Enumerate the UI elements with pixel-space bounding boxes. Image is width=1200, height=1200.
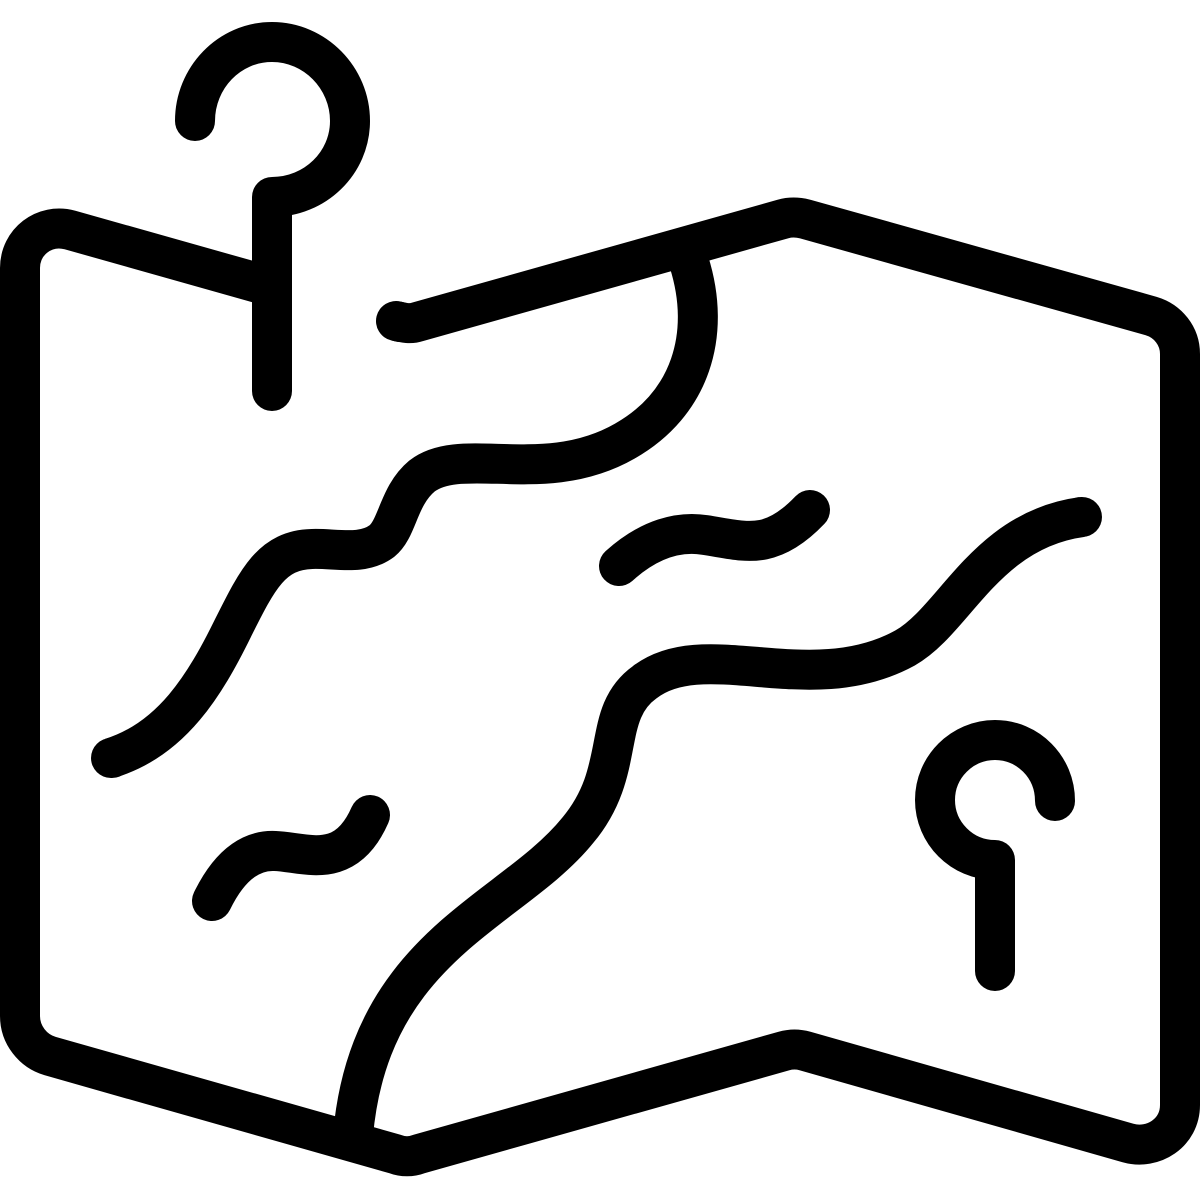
river: upper left	[111, 262, 698, 758]
stream: centre	[619, 510, 810, 566]
river: long centre	[353, 517, 1082, 1135]
map outline	[20, 218, 1180, 1156]
stream: lower left	[212, 815, 370, 901]
pin: bottom right	[935, 740, 1055, 971]
pin: top left	[195, 42, 350, 391]
